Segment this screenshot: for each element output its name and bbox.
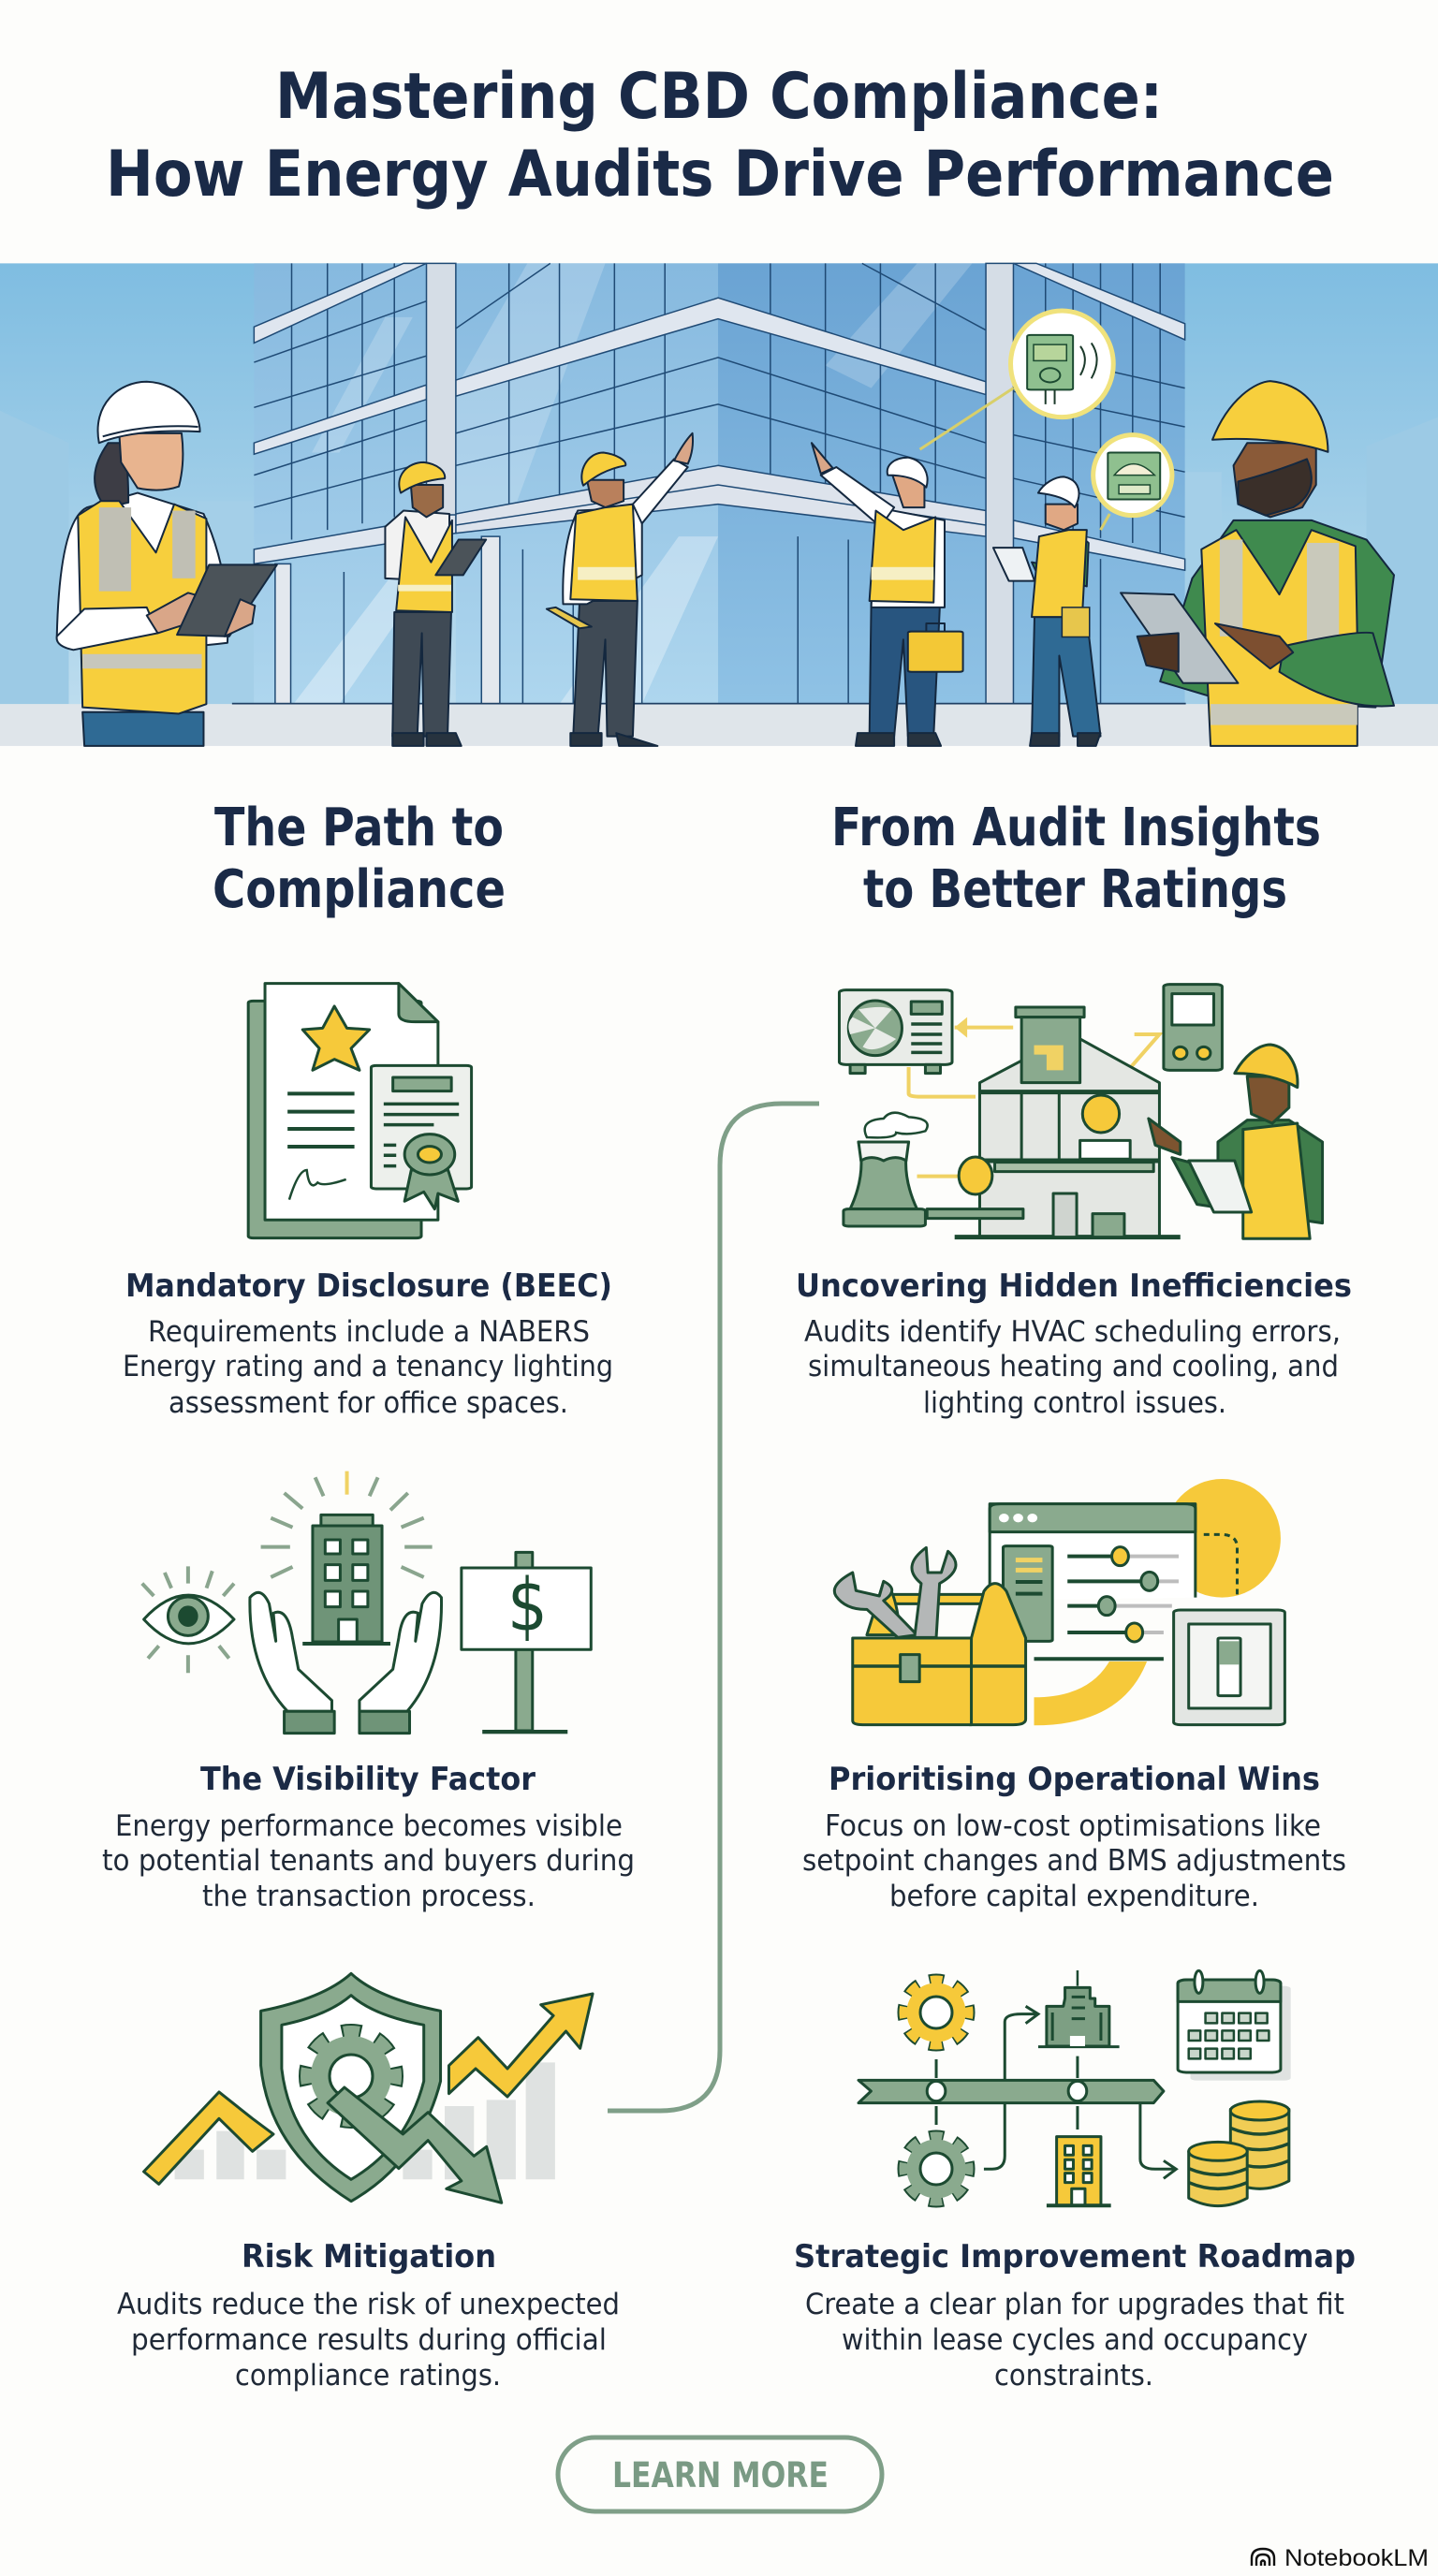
title <box>106 60 1334 212</box>
heading: The Path to Compliance <box>213 798 506 920</box>
item heading: Prioritising Operational Wins <box>829 1761 1320 1798</box>
item text: before capital expenditure. <box>889 1880 1259 1913</box>
item text: setpoint changes and BMS adjustments <box>802 1844 1346 1878</box>
item text: compliance ratings. <box>235 2359 501 2393</box>
worker: left with tablet <box>57 382 277 746</box>
item text: lighting control issues. <box>923 1386 1226 1420</box>
icon: certificate document <box>248 984 472 1238</box>
item text: simultaneous heating and cooling, and <box>808 1350 1339 1383</box>
worker: tablet second <box>385 462 486 746</box>
icon: eye, building in hands, price sign <box>142 1471 591 1734</box>
callout: sensor device <box>920 311 1113 449</box>
item text: Energy performance becomes visible <box>115 1809 623 1843</box>
hero banner: auditors in front of glass building <box>0 263 1438 746</box>
button: Learn More <box>558 2437 882 2511</box>
item text <box>805 2288 1344 2393</box>
heading: From Audit Insights to Better Ratings: From Audit Insights <box>831 798 1321 858</box>
logo: NotebookLM: NotebookLM <box>1284 2545 1429 2571</box>
panel: Mandatory Disclosure <box>123 984 613 1420</box>
worker: pointing up, hammer <box>547 433 693 746</box>
item heading: The Visibility Factor <box>200 1761 536 1798</box>
item text: Create a clear plan for upgrades that fit <box>805 2288 1344 2321</box>
item text: Audits identify HVAC scheduling errors, <box>804 1315 1341 1349</box>
item text: the transaction process. <box>202 1880 536 1913</box>
worker: pointing up, briefcase <box>812 443 963 746</box>
icon: toolbox, BMS dashboard, switch <box>834 1479 1284 1725</box>
item text <box>804 1315 1341 1420</box>
item text <box>123 1315 613 1420</box>
item text: performance results during official <box>131 2323 607 2357</box>
item heading: Mandatory Disclosure (BEEC) <box>125 1267 612 1305</box>
panel: Strategic Improvement Roadmap <box>794 1970 1356 2393</box>
item text: to potential tenants and buyers during <box>102 1844 635 1878</box>
item heading: Strategic Improvement Roadmap <box>794 2238 1356 2276</box>
item text: assessment for office spaces. <box>169 1386 568 1420</box>
glass building <box>254 263 1185 704</box>
button: Learn More: LEARN MORE <box>612 2455 829 2496</box>
heading: From Audit Insights to Better Ratings: to Better Ratings <box>863 859 1287 920</box>
icon: roadmap timeline with gears, buildings, calendar, coins <box>858 1970 1291 2206</box>
item text <box>117 2288 620 2393</box>
item text: Focus on low-cost optimisations like <box>825 1809 1321 1843</box>
icon: shield, gear, performance arrows <box>144 1973 593 2203</box>
arrow: connector from left column to right column <box>608 1104 819 2111</box>
item text: within lease cycles and occupancy <box>842 2323 1308 2357</box>
panel: Risk Mitigation <box>117 1973 620 2393</box>
item text: Requirements include a NABERS <box>148 1315 590 1349</box>
item text: Energy rating and a tenancy lighting <box>123 1350 613 1383</box>
icon: building systems audit <box>839 985 1323 1238</box>
item heading: Risk Mitigation <box>242 2238 496 2276</box>
item text <box>802 1809 1346 1913</box>
item text <box>102 1809 635 1913</box>
worker: right with tablet, bearded <box>1121 381 1394 746</box>
item text: constraints. <box>994 2359 1153 2393</box>
worker: tablet, green sleeve <box>993 476 1101 746</box>
panel: Prioritising Operational Wins <box>802 1479 1346 1913</box>
heading: From Audit Insights to Better Ratings <box>831 798 1321 920</box>
item text: Audits reduce the risk of unexpected <box>117 2288 620 2321</box>
heading: The Path to Compliance: Compliance <box>213 859 506 920</box>
icon: eye, building in hands, price sign: $ <box>507 1564 548 1648</box>
title: Mastering CBD Compliance: <box>275 60 1163 134</box>
callout: gauge device <box>1093 435 1172 530</box>
panel: The Visibility Factor <box>102 1471 635 1913</box>
item heading: Uncovering Hidden Inefficiencies <box>796 1267 1352 1305</box>
heading: The Path to Compliance: The Path to <box>214 798 504 858</box>
panel: Uncovering Hidden Inefficiencies <box>796 985 1352 1420</box>
ground <box>0 704 1438 746</box>
